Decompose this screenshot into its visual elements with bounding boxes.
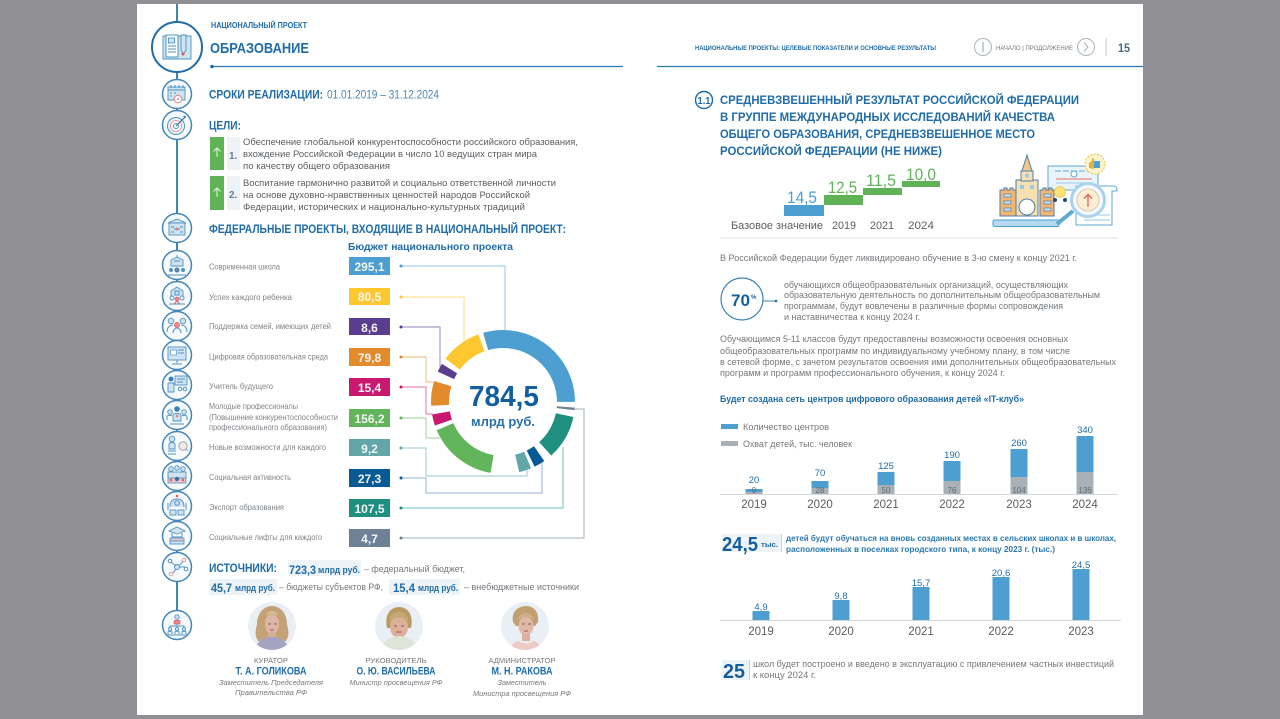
callout: 70 percent: и наставничества к концу 2024 г. bbox=[784, 312, 920, 322]
portrait: Golikova bbox=[248, 602, 296, 652]
bar chart: IT-club centres: 340 bbox=[1077, 425, 1093, 436]
icon: young professionals bbox=[162, 400, 192, 430]
panel: budget value boxes bbox=[349, 257, 390, 547]
callout: 25 schools: к концу 2024 г. bbox=[753, 670, 816, 680]
panel: goals: Обеспечение глобальной конкурентоспособности российского образования, bbox=[243, 137, 578, 148]
panel: funding sources bbox=[209, 560, 579, 595]
panel: project labels: Социальные лифты для каждого bbox=[209, 533, 323, 542]
bar chart: IT-club centres: 8 bbox=[752, 486, 757, 495]
panel: funding sources: ИСТОЧНИКИ: bbox=[209, 563, 277, 575]
panel: budget value boxes: 15,4 bbox=[358, 381, 382, 395]
callout: 70 percent: образовательную деятельность по дополнительным общеобразовательным bbox=[784, 290, 1100, 300]
bar chart: new rural school places: 20,6 bbox=[992, 568, 1010, 579]
callout: 24,5 thousand: тыс. bbox=[761, 542, 778, 549]
person: curator: Правительства РФ bbox=[235, 688, 307, 697]
icon: organisation hierarchy bbox=[162, 610, 192, 640]
person: curator: Заместитель Председателя bbox=[219, 678, 323, 687]
heading: budget: Бюджет национального проекта bbox=[348, 241, 513, 253]
panel: goals: на основе духовно-нравственных ценностей народов Российской bbox=[243, 190, 530, 201]
bar chart: IT-club centres: 50 bbox=[882, 486, 891, 495]
panel: funding sources: 15,4 bbox=[393, 581, 415, 595]
bar chart: IT-club centres: 28 bbox=[816, 486, 825, 495]
text block: implementation dates: СРОКИ РЕАЛИЗАЦИИ: bbox=[209, 90, 323, 102]
bar chart: new rural school places: 9,8 bbox=[834, 591, 848, 602]
text: individual curriculum bbox=[720, 334, 1116, 378]
chart: rank steps: 2021 bbox=[870, 220, 894, 232]
panel: budget value boxes: 80,5 bbox=[358, 290, 382, 304]
panel: funding sources: млрд руб. bbox=[235, 583, 275, 593]
bar chart: new rural school places: 24,5 bbox=[1072, 560, 1090, 571]
callout: 24,5 thousand: 24,5 bbox=[722, 534, 758, 556]
chart legend: Количество центров bbox=[743, 422, 829, 432]
icon: new opportunities bbox=[162, 432, 192, 460]
panel: budget value boxes: 107,5 bbox=[354, 502, 385, 516]
chart: rank steps bbox=[731, 165, 940, 232]
illustration: kremlin tower and magnifier bbox=[993, 154, 1117, 226]
panel: budget value boxes: 4,7 bbox=[361, 532, 378, 546]
panel: budget value boxes: 27,3 bbox=[358, 472, 382, 486]
panel: funding sources: млрд руб. bbox=[318, 565, 360, 575]
panel: funding sources: – бюджеты субъектов РФ, bbox=[279, 582, 383, 592]
divider bbox=[720, 237, 1118, 239]
panel: goals: 1. bbox=[229, 151, 238, 162]
panel: budget value boxes: 79,8 bbox=[358, 351, 382, 365]
header: right page navigation: 15 bbox=[1118, 41, 1130, 55]
person: head: Министр просвещения РФ bbox=[350, 678, 443, 687]
text block: implementation dates: 01.01.2019 – 31.12.2024 bbox=[327, 90, 440, 102]
bar chart: IT-club centres: 104 bbox=[1012, 486, 1026, 495]
heading: indicator 1.1: РОССИЙСКОЙ ФЕДЕРАЦИИ (НЕ НИЖЕ) bbox=[720, 143, 942, 158]
heading: national project bbox=[210, 21, 623, 68]
bar chart: IT-club centres: 136 bbox=[1078, 486, 1092, 495]
icon: social lifts bbox=[162, 522, 192, 550]
chart: rank steps: 11,5 bbox=[866, 171, 896, 190]
person: curator bbox=[219, 656, 323, 697]
icon: digital monitor bbox=[162, 340, 192, 370]
panel: goals: Федерации, исторических и национально-культурных традиций bbox=[243, 202, 525, 213]
panel: project labels: Поддержка семей, имеющих детей bbox=[209, 322, 331, 331]
callout: 70 percent: 70 bbox=[731, 291, 750, 310]
heading: indicator 1.1: В ГРУППЕ МЕЖДУНАРОДНЫХ ИССЛЕДОВАНИЙ КАЧЕСТВА bbox=[720, 109, 1055, 124]
panel: goals: ЦЕЛИ: bbox=[209, 120, 241, 132]
icon: modern school bbox=[162, 250, 192, 280]
bar chart: new rural school places: 4,9 bbox=[754, 602, 768, 613]
callout: 24,5 thousand: детей будут обучаться на вновь созданных местах в сельских школах и в школах, bbox=[786, 533, 1116, 543]
text: individual curriculum: Обучающимся 5-11 классов будут предоставлены возможности освоения основных bbox=[720, 334, 1068, 344]
bar chart: new rural school places: 2021 bbox=[908, 626, 934, 638]
chart: rank steps: 14,5 bbox=[787, 188, 817, 207]
heading: indicator 1.1: СРЕДНЕВЗВЕШЕННЫЙ РЕЗУЛЬТАТ РОССИЙСКОЙ ФЕДЕРАЦИИ bbox=[720, 92, 1079, 107]
donut total bbox=[469, 381, 539, 429]
person: administrator: Заместитель bbox=[498, 678, 547, 687]
panel: project labels: Успех каждого ребенка bbox=[209, 293, 293, 302]
chart: rank steps: 2019 bbox=[832, 220, 856, 232]
chart: rank steps: 10,0 bbox=[906, 165, 936, 184]
person: curator: КУРАТОР bbox=[254, 656, 288, 665]
heading: indicator 1.1: 1.1 bbox=[698, 96, 711, 107]
icon: federal projects bbox=[162, 214, 192, 242]
icon: social activity bbox=[162, 462, 192, 490]
callout: 70 percent: программам, будут вовлечены в различные формы сопровождения bbox=[784, 301, 1063, 311]
person: administrator: Министра просвещения РФ bbox=[473, 689, 571, 698]
panel: budget value boxes: 9,2 bbox=[361, 442, 378, 456]
header: right page navigation: НАЧАЛО | ПРОДОЛЖЕНИЕ bbox=[996, 45, 1074, 52]
icon: calendar bbox=[162, 80, 192, 108]
person: head: РУКОВОДИТЕЛЬ bbox=[366, 656, 427, 665]
callout: 70 percent bbox=[721, 278, 1100, 322]
heading: national project: ОБРАЗОВАНИЕ bbox=[210, 40, 309, 57]
icon: book and pencil bbox=[152, 22, 202, 72]
header: right page navigation: НАЦИОНАЛЬНЫЕ ПРОЕКТЫ: ЦЕЛЕВЫЕ ПОКАЗАТЕЛИ И ОСНОВНЫЕ РЕЗУЛЬТАТЫ bbox=[695, 45, 936, 52]
icon: teacher bbox=[162, 370, 192, 400]
person: head: О. Ю. ВАСИЛЬЕВА bbox=[356, 666, 436, 678]
panel: project labels: профессионального образования) bbox=[209, 423, 327, 432]
bar chart: new rural school places: 2020 bbox=[828, 626, 854, 638]
panel: funding sources: – внебюджетные источники bbox=[464, 582, 579, 592]
bar chart: new rural school places bbox=[720, 560, 1121, 638]
page sheet bbox=[137, 4, 1143, 715]
bar chart: new rural school places: 2022 bbox=[988, 626, 1014, 638]
panel: left timeline of icons bbox=[152, 4, 202, 640]
donut total: 784,5 bbox=[469, 381, 539, 413]
icon: target bbox=[162, 110, 192, 140]
bar chart: IT-club centres: 76 bbox=[948, 486, 957, 495]
donut total: млрд руб. bbox=[471, 414, 535, 429]
bar chart: new rural school places: 15,7 bbox=[912, 578, 930, 589]
person: administrator: М. Н. РАКОВА bbox=[492, 666, 553, 678]
icon: child success bbox=[162, 282, 192, 310]
panel: budget value boxes: 8,6 bbox=[361, 321, 378, 335]
text: individual curriculum: программ и программ профессионального обучения, к концу 2024 г. bbox=[720, 368, 1005, 378]
callout: 25 schools: школ будет построено и введено в эксплуатацию с привлечением частных инвестиций bbox=[753, 659, 1114, 669]
header: right page navigation bbox=[657, 38, 1143, 66]
bar chart: IT-club centres: 20 bbox=[749, 475, 759, 486]
text: individual curriculum: в сетевой форме, с зачетом результатов освоения ими дополнительных общеобразовательных bbox=[720, 357, 1116, 367]
bar chart: new rural school places: 2023 bbox=[1068, 626, 1094, 638]
panel: budget value boxes: 295,1 bbox=[354, 260, 385, 274]
chart: rank steps: Базовое значение bbox=[731, 220, 823, 232]
callout: 25 schools bbox=[722, 659, 1114, 683]
panel: funding sources: – федеральный бюджет, bbox=[364, 564, 465, 574]
heading: IT-club: Будет создана сеть центров цифрового образования детей «IT-клуб» bbox=[720, 394, 1024, 404]
portrait: Rakova bbox=[501, 602, 549, 652]
callout: 70 percent: % bbox=[751, 295, 757, 301]
chart legend bbox=[721, 422, 852, 449]
chart legend: Охват детей, тыс. человек bbox=[743, 439, 852, 449]
bar chart: IT-club centres: 2021 bbox=[873, 499, 899, 511]
icon: export of education bbox=[162, 492, 192, 520]
panel: goals: по качеству общего образования bbox=[243, 161, 390, 172]
bar chart: IT-club centres: 260 bbox=[1011, 438, 1027, 449]
bar chart: IT-club centres: 70 bbox=[815, 468, 825, 479]
bar chart: IT-club centres: 125 bbox=[878, 461, 894, 472]
bar chart: IT-club centres: 2019 bbox=[741, 499, 767, 511]
panel: project labels: Учитель будущего bbox=[209, 382, 274, 391]
panel: funding sources: 45,7 bbox=[211, 581, 232, 595]
panel: project labels: Цифровая образовательная среда bbox=[209, 352, 329, 362]
panel: project labels: Экспорт образования bbox=[209, 503, 284, 512]
callout: 24,5 thousand bbox=[722, 533, 1116, 556]
panel: project labels: Новые возможности для каждого bbox=[209, 443, 327, 452]
chart: rank steps: 2024 bbox=[908, 220, 934, 232]
bar chart: IT-club centres: 190 bbox=[944, 450, 960, 461]
callout: 25 schools: 25 bbox=[723, 661, 745, 683]
panel: goals: вхождение Российской Федерации в число 10 ведущих стран мира bbox=[243, 149, 538, 160]
panel: project labels bbox=[209, 262, 338, 542]
person: administrator: АДМИНИСТРАТОР bbox=[488, 656, 556, 665]
panel: project labels: Молодые профессионалы bbox=[209, 402, 298, 411]
panel: connector lines bbox=[400, 264, 584, 540]
heading: indicator 1.1: ОБЩЕГО ОБРАЗОВАНИЯ, СРЕДНЕВЗВЕШЕННОЕ МЕСТО bbox=[720, 127, 1035, 141]
callout: 24,5 thousand: расположенных в поселках городского типа, к концу 2023 г. (тыс.) bbox=[786, 544, 1055, 554]
bar chart: IT-club centres: 2024 bbox=[1072, 499, 1098, 511]
person: head bbox=[350, 656, 443, 687]
text: individual curriculum: общеобразовательных программ по индивидуальному учебному плану, в том числе bbox=[720, 346, 1070, 356]
bar chart: new rural school places: 2019 bbox=[748, 626, 774, 638]
panel: goals: 2. bbox=[229, 190, 238, 201]
heading: federal projects: ФЕДЕРАЛЬНЫЕ ПРОЕКТЫ, ВХОДЯЩИЕ В НАЦИОНАЛЬНЫЙ ПРОЕКТ: bbox=[209, 223, 566, 236]
callout: 70 percent: обучающихся общеобразовательных организаций, осуществляющих bbox=[784, 280, 1068, 290]
text block: implementation dates bbox=[209, 90, 440, 102]
panel: goals: Воспитание гармонично развитой и социально ответственной личности bbox=[243, 178, 556, 189]
heading: indicator 1.1 bbox=[696, 92, 1079, 158]
panel: project labels: Социальная активность bbox=[209, 473, 291, 482]
person: administrator bbox=[473, 656, 571, 698]
heading: national project: НАЦИОНАЛЬНЫЙ ПРОЕКТ bbox=[211, 21, 307, 30]
chart: rank steps: 12,5 bbox=[828, 178, 857, 197]
panel: goals bbox=[209, 120, 578, 213]
person: curator: Т. А. ГОЛИКОВА bbox=[236, 666, 307, 678]
bar chart: IT-club centres: 2022 bbox=[939, 499, 965, 511]
panel: budget value boxes: 156,2 bbox=[354, 412, 385, 426]
bar chart: IT-club centres: 2020 bbox=[807, 499, 833, 511]
bar chart: IT-club centres: 2023 bbox=[1006, 499, 1032, 511]
panel: project labels: Современная школа bbox=[209, 262, 281, 272]
bar chart: IT-club centres bbox=[720, 425, 1118, 511]
panel: project labels: (Повышение конкурентоспособности bbox=[209, 413, 338, 422]
text: third shift: В Российской Федерации будет ликвидировано обучение в 3-ю смену к концу 2021 г. bbox=[720, 253, 1077, 263]
panel: funding sources: млрд руб. bbox=[418, 583, 458, 593]
portrait: Vasilyeva bbox=[375, 602, 423, 651]
donut chart: budget 784,5 bbox=[415, 314, 591, 490]
icon: sources network bbox=[162, 552, 192, 582]
icon: family bbox=[162, 312, 192, 340]
panel: funding sources: 723,3 bbox=[289, 563, 316, 577]
